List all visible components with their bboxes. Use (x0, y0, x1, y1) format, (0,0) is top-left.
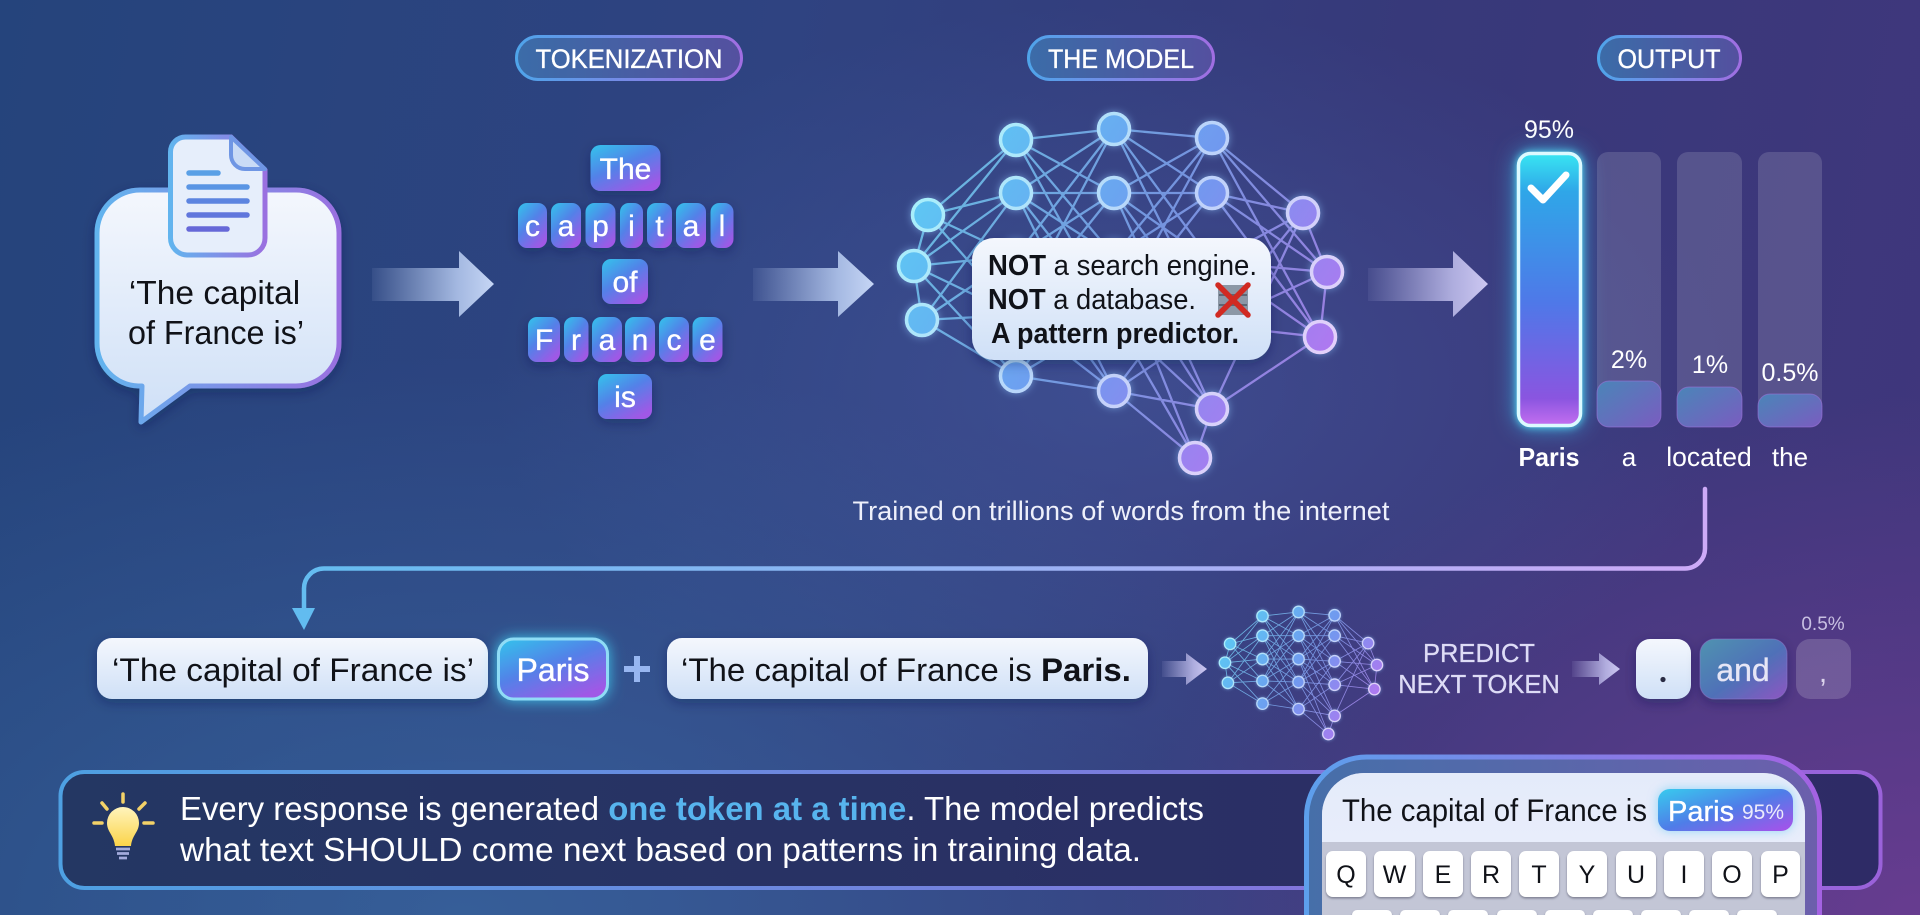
heading: tokenization: TOKENIZATION (536, 44, 722, 74)
panel: tokens: F (535, 324, 553, 357)
arrow: prompt to tokenization (372, 251, 494, 317)
token: and: and (1716, 652, 1770, 688)
keyboard keys: Y (1579, 861, 1596, 889)
panel: tokens: The (600, 153, 651, 186)
label: predict next token: NEXT TOKEN (1398, 671, 1560, 699)
bar: a 2% (1597, 152, 1661, 472)
panel: tokens: c (525, 210, 540, 243)
callout: not a search engine: A pattern predictor. (991, 318, 1239, 350)
keyboard keys: U (1627, 861, 1645, 889)
bar chart: output probabilities (1518, 116, 1822, 472)
extended prompt pill (667, 638, 1148, 699)
bar: located 1%: located (1666, 442, 1752, 472)
plus sign (624, 656, 650, 682)
bar: a 2%: 2% (1611, 346, 1647, 374)
heading: output (1598, 36, 1740, 80)
speech bubble shape (97, 190, 339, 422)
arrow: to small network (1162, 653, 1207, 685)
token: period (1636, 639, 1691, 699)
callout: not a search engine: NOT a database. (988, 284, 1196, 316)
arrow: feedback connector (292, 489, 1705, 630)
panel: takeaway banner (60, 772, 1880, 888)
icon: document (170, 137, 265, 255)
keyboard tray (1322, 773, 1805, 915)
panel: tokens: a (558, 210, 575, 243)
bubble text: ‘The capital (129, 275, 300, 312)
bar: Paris 95%: 95% (1524, 116, 1574, 144)
arrow: model to output (1368, 251, 1488, 317)
takeaway text: what text SHOULD come next based on patterns in training data. (179, 832, 1141, 869)
heading: the model: THE MODEL (1048, 44, 1194, 74)
token: comma: 0.5% (1801, 614, 1845, 635)
panel: tokens: a (683, 210, 700, 243)
panel: tokens: n (632, 324, 648, 357)
keyboard keys: I (1681, 861, 1687, 889)
icon: database crossed out (1218, 285, 1248, 315)
small neural network (1219, 606, 1383, 740)
label: predict next token (1398, 640, 1560, 699)
panel: tokens (518, 145, 734, 419)
panel: tokens: e (699, 324, 716, 357)
prompt pill: ‘The capital of France is’ (112, 652, 474, 688)
prompt pill (97, 638, 488, 699)
keyboard keys: W (1383, 861, 1407, 889)
prediction chip: 95% (1742, 801, 1784, 824)
panel: tokens: is (614, 381, 636, 414)
panel: prompt speech bubble (97, 137, 339, 422)
token: comma (1796, 614, 1851, 699)
prediction chip (1658, 789, 1793, 831)
paris token: Paris (517, 652, 589, 688)
paris token (498, 639, 608, 699)
bar: Paris 95% (1518, 116, 1580, 472)
label: predict next token: PREDICT (1423, 640, 1535, 668)
panel: tokens: of (612, 266, 638, 299)
panel: tokens: t (655, 210, 664, 243)
takeaway text (179, 791, 1204, 869)
bar: the 0.5%: the (1772, 442, 1808, 472)
suggestion bar: The capital of France is (1342, 792, 1647, 828)
callout: not a search engine: NOT a search engine. (988, 250, 1257, 282)
bubble text: of France is’ (128, 315, 304, 352)
prediction chip: Paris (1668, 796, 1734, 828)
bubble text (128, 275, 304, 352)
bar: a 2%: a (1622, 442, 1637, 472)
bar: the 0.5%: 0.5% (1762, 359, 1818, 387)
keyboard keys: E (1435, 861, 1451, 889)
bar: the 0.5% (1758, 152, 1822, 472)
keyboard keys: R (1482, 861, 1500, 889)
arrow: tokens to model (753, 251, 874, 317)
panel: tokens: a (599, 324, 616, 357)
keyboard keys: Q (1336, 861, 1356, 889)
bar: Paris 95%: Paris (1518, 442, 1580, 472)
panel: tokens: l (719, 210, 725, 243)
keyboard keys (1326, 851, 1800, 915)
caption: training data: Trained on trillions of words from the internet (853, 495, 1390, 526)
candidate tokens (1636, 614, 1851, 699)
suggestion bar (1322, 773, 1805, 842)
arrow: to candidates (1572, 653, 1620, 685)
extended prompt pill: ‘The capital of France is Paris. (681, 652, 1131, 688)
panel: tokens: c (666, 324, 682, 357)
neural network (898, 114, 1342, 474)
keyboard keys: T (1531, 861, 1547, 889)
panel: phone keyboard autocomplete (1306, 757, 1820, 915)
token: and (1700, 639, 1787, 699)
phone frame (1306, 757, 1820, 915)
heading: the model (1028, 36, 1214, 80)
panel: prompt plus token loop (97, 638, 1148, 699)
bar: located 1% (1666, 152, 1752, 472)
takeaway text: Every response is generated one token at a time. The model predicts (180, 791, 1204, 828)
keyboard keys: O (1722, 861, 1742, 889)
callout: not a search engine (972, 238, 1271, 360)
panel: tokens: p (592, 210, 609, 243)
keyboard keys: P (1772, 861, 1789, 889)
heading: tokenization (516, 36, 742, 80)
panel: tokens: r (571, 324, 581, 357)
bar: located 1%: 1% (1692, 351, 1728, 379)
heading: output: OUTPUT (1618, 44, 1720, 74)
token: comma: , (1819, 656, 1827, 689)
icon: light bulb (94, 794, 153, 858)
panel: tokens: i (628, 210, 635, 243)
